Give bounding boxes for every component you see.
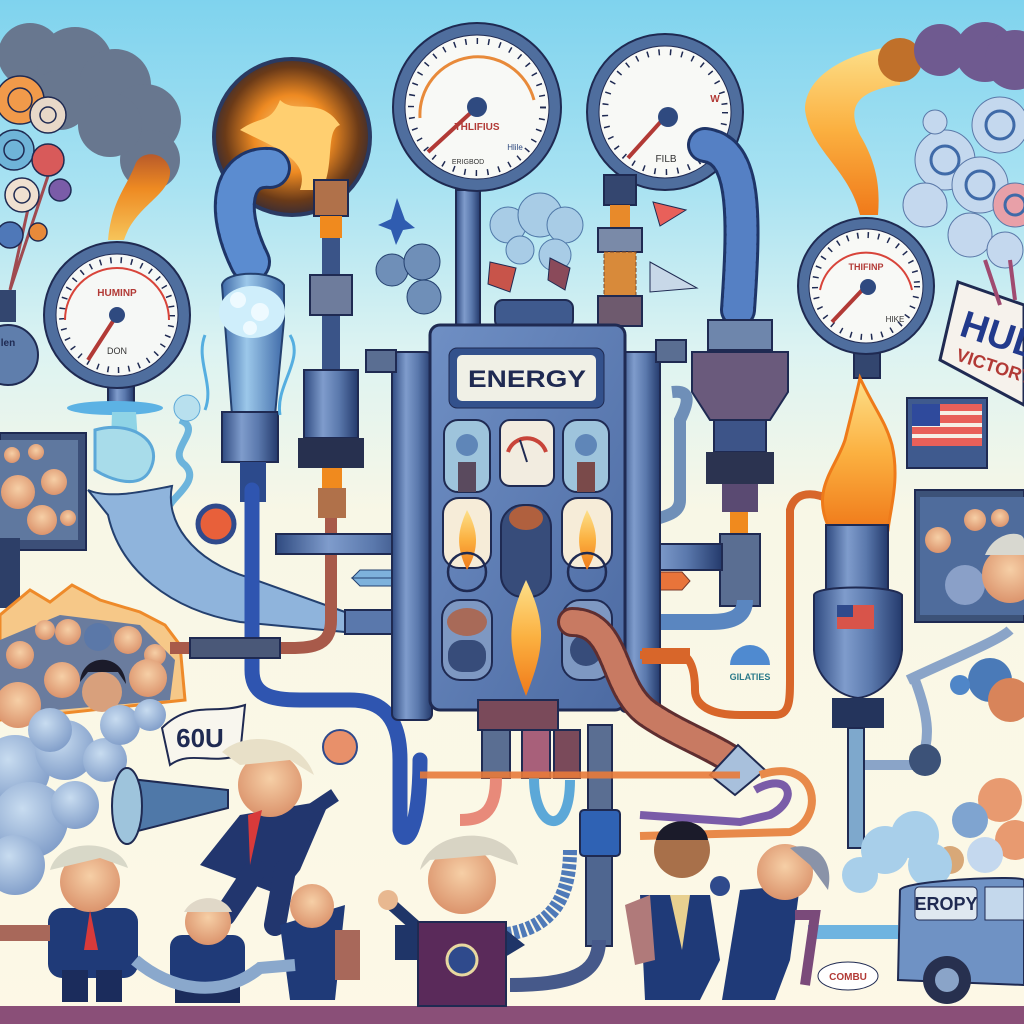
side pipes: main right <box>622 544 745 622</box>
copper hose: panel to nozzle <box>572 622 735 762</box>
gauge: top right: W <box>710 94 720 105</box>
striped ball <box>198 506 234 542</box>
flame: right burner <box>822 378 895 530</box>
flag frame <box>907 398 987 468</box>
banner: right <box>940 282 1024 405</box>
flame: top right plume <box>805 45 900 215</box>
figure: crouching small <box>170 898 245 1003</box>
gauge: top center: ERIGBOD <box>452 159 484 166</box>
balloons: top left swirl bouquet <box>0 76 71 290</box>
glass orb with flame <box>214 59 370 215</box>
valve stack: right <box>636 320 788 606</box>
lower knobs <box>442 600 612 680</box>
funnel pipe: left light blue <box>88 486 345 632</box>
gauge: left: HUMINP <box>97 288 137 299</box>
nozzle and orange loop <box>640 745 812 836</box>
machinery and cloud cluster: lower right <box>842 630 1024 893</box>
swirl clouds: centre <box>490 193 583 271</box>
lower pipe column <box>420 725 740 985</box>
megaphone <box>112 768 228 844</box>
gauge: right <box>798 218 934 378</box>
swirl knots: centre left <box>376 244 441 314</box>
gauge: right: HIKE <box>886 315 904 324</box>
balloons and clouds: top right <box>903 97 1024 305</box>
speech bubble: COMBU <box>829 972 867 983</box>
water squiggles <box>202 335 294 415</box>
flame: top left plume <box>108 154 170 240</box>
energy label <box>449 348 604 408</box>
blue pipe: long loop <box>252 490 420 837</box>
screen: left crowd <box>0 433 86 608</box>
gauge: top center: THLIFIUS <box>454 122 500 133</box>
flag sign: 60U <box>176 723 224 753</box>
gauge: left <box>44 242 190 413</box>
figure: seated left interview <box>625 821 720 1000</box>
smoke: top right purple <box>878 22 1024 90</box>
flag sign <box>162 705 245 765</box>
smoke cloud: lower left <box>0 699 166 895</box>
ice column <box>219 274 285 502</box>
globe tank: far left <box>0 290 38 385</box>
corrugated hose: blue left <box>235 168 270 262</box>
van <box>808 878 1024 1004</box>
burner windows <box>443 498 612 696</box>
base pipe left <box>0 925 50 941</box>
gauge: right: THIFINP <box>848 262 884 272</box>
figure: seated right interview <box>710 844 829 1000</box>
water pool and spout <box>67 395 200 505</box>
podium <box>418 922 506 1006</box>
smoke cloud: top left <box>0 23 181 190</box>
small logo text: GILATIES <box>730 672 770 682</box>
pennant flags <box>488 202 697 292</box>
energy label: ENERGY <box>468 366 586 393</box>
figure: standing with pipe <box>135 884 360 1000</box>
spring column: right of centre <box>598 175 642 326</box>
gauge: left: DON <box>107 346 127 356</box>
figure: at podium <box>378 836 525 960</box>
corrugated hose: blue right <box>705 145 742 310</box>
connectors under tank <box>460 700 580 821</box>
striped ball small <box>323 730 357 764</box>
side pipes: main left <box>190 534 430 658</box>
orange pipe: to burner <box>640 494 830 715</box>
van: EROPY <box>914 894 978 914</box>
small star <box>378 198 415 245</box>
gauge: top right <box>587 34 743 190</box>
small logo text <box>730 645 770 682</box>
crowd group: left faces <box>0 585 185 728</box>
gauge: top center: Hlile <box>507 143 523 152</box>
control panel <box>430 325 625 710</box>
small dials <box>444 420 609 492</box>
gauge: top right: FILB <box>655 154 677 165</box>
screen: right crowd <box>915 490 1024 622</box>
main tank <box>366 300 686 720</box>
valve column: central left <box>170 180 364 648</box>
speech bubble <box>818 962 878 990</box>
ground strip <box>0 1006 1024 1024</box>
globe tank: far left: len <box>1 338 15 349</box>
figure: standing left <box>48 845 138 1002</box>
burner tank <box>814 525 902 848</box>
figure: jumping speaker <box>200 739 335 925</box>
gauge: top center <box>393 23 561 325</box>
